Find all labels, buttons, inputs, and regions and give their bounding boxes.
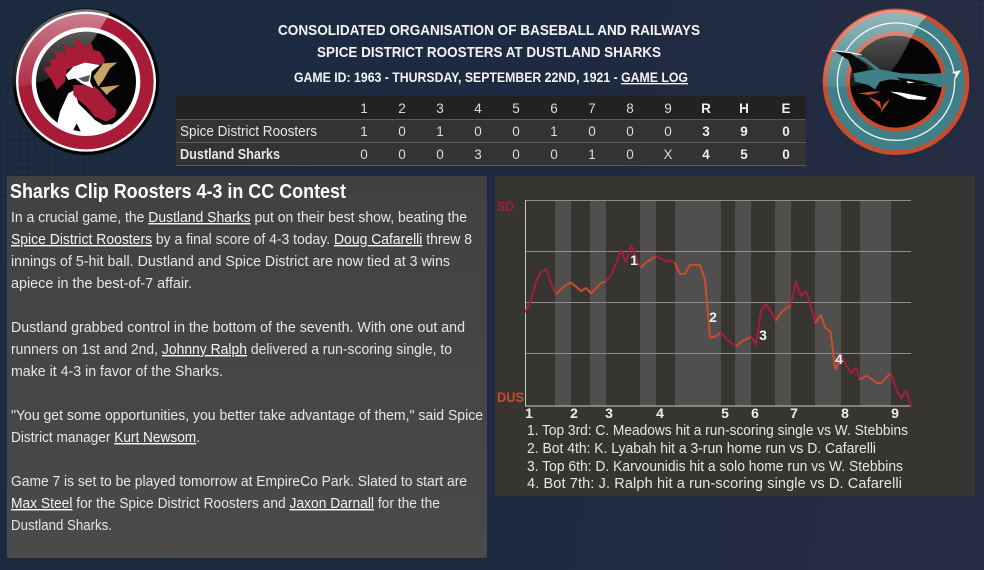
scoreboard header row: 7: [588, 101, 596, 116]
scoreboard header row: 8: [626, 101, 634, 116]
story paragraph 1: apiece in the best-of-7 affair.: [11, 276, 192, 292]
scoreboard header row: 3: [436, 101, 444, 116]
inning axis labels: 5: [721, 405, 729, 421]
story paragraph 1: In a crucial game, the Dustland Sharks put on their best show, beating the: [11, 210, 467, 226]
scoreboard header row: 6: [550, 101, 558, 116]
scoreboard row: Dustland Sharks: 0: [782, 147, 790, 162]
title block: SPICE DISTRICT ROOSTERS AT DUSTLAND SHARKS: [317, 44, 661, 61]
key events list: [527, 423, 908, 492]
win probability line: [526, 245, 911, 406]
key events list: 3. Top 6th: D. Karvounidis hit a solo home run vs W. Stebbins: [527, 459, 903, 475]
story paragraph 3: District manager Kurt Newsom.: [11, 430, 200, 446]
story paragraph 4: Dustland Sharks.: [11, 518, 112, 534]
scoreboard row: Spice District Roosters: 0: [626, 124, 634, 139]
story paragraph 2: make it 4-3 in favor of the Sharks.: [11, 364, 223, 380]
event markers: 3: [759, 327, 767, 343]
scoreboard row: Spice District Roosters: 1: [360, 124, 368, 139]
logo: Spice District Roosters rooster badge: [12, 8, 160, 155]
story paragraph 2: runners on 1st and 2nd, Johnny Ralph delivered a run-scoring single, to: [11, 342, 452, 358]
scoreboard row: Dustland Sharks: Dustland Sharks: [180, 147, 280, 163]
scoreboard table: [176, 96, 806, 166]
event markers: 4: [835, 351, 843, 367]
panel: game story: [7, 176, 487, 558]
scoreboard row: Spice District Roosters: 3: [702, 124, 710, 139]
scoreboard row: Dustland Sharks: 0: [550, 147, 558, 162]
title block: CONSOLIDATED ORGANISATION OF BASEBALL AND RAILWAYS: [278, 22, 700, 39]
scoreboard row: Spice District Roosters: 9: [740, 124, 748, 139]
scoreboard row: Dustland Sharks: 5: [740, 147, 748, 162]
scoreboard header row: 1: [360, 101, 368, 116]
scoreboard row: Dustland Sharks: X: [663, 147, 673, 162]
key events list: 4. Bot 7th: J. Ralph hit a run-scoring single vs D. Cafarelli: [527, 476, 902, 492]
scoreboard row: Dustland Sharks: 1: [588, 147, 596, 162]
logo: Dustland Sharks shark badge: [822, 8, 970, 155]
story paragraph 3: "You get some opportunities, you better take advantage of them," said Spice: [11, 408, 483, 424]
inning axis labels: 3: [605, 405, 613, 421]
story paragraph 4: Max Steel for the Spice District Roosters and Jaxon Darnall for the the: [11, 496, 440, 512]
story paragraph 4: Game 7 is set to be played tomorrow at EmpireCo Park. Slated to start are: [11, 474, 467, 490]
event markers: 2: [709, 309, 717, 325]
inning axis labels: 9: [891, 405, 899, 421]
axis label: DUS: DUS: [497, 390, 524, 405]
inning axis labels: 2: [570, 405, 578, 421]
scoreboard row: Dustland Sharks: [180, 147, 790, 163]
story paragraph 1: Spice District Roosters by a final score of 4-3 today. Doug Cafarelli threw 8: [11, 232, 472, 248]
story paragraph 3: [11, 408, 483, 446]
inning axis labels: [525, 405, 899, 421]
scoreboard header row: H: [739, 101, 749, 116]
scoreboard row: Dustland Sharks: 0: [436, 147, 444, 162]
event markers: 1: [630, 252, 638, 268]
inning axis labels: 7: [790, 405, 798, 421]
title block: [278, 22, 700, 85]
scoreboard header row: 4: [474, 101, 482, 116]
story paragraph 2: [11, 320, 465, 380]
scoreboard row: Spice District Roosters: 0: [588, 124, 596, 139]
scoreboard row: Spice District Roosters: Spice District Roosters: [180, 124, 317, 140]
scoreboard header row: 2: [398, 101, 406, 116]
inning bands: [555, 200, 891, 406]
event markers: [630, 252, 843, 367]
scoreboard row: Dustland Sharks: 0: [398, 147, 406, 162]
scoreboard row: Dustland Sharks: 0: [626, 147, 634, 162]
scoreboard header row: [360, 101, 791, 116]
scoreboard header row: R: [701, 101, 711, 116]
scoreboard header row: 5: [512, 101, 520, 116]
story headline: Sharks Clip Roosters 4-3 in CC Contest: [10, 181, 346, 203]
scoreboard row: Spice District Roosters: 0: [782, 124, 790, 139]
key events list: 2. Bot 4th: K. Lyabah hit a 3-run home run vs D. Cafarelli: [527, 441, 876, 457]
inning axis labels: 6: [751, 405, 759, 421]
inning axis labels: 4: [656, 405, 664, 421]
scoreboard row: Dustland Sharks: 0: [512, 147, 520, 162]
title block: GAME ID: 1963 - THURSDAY, SEPTEMBER 22ND, 1921 - GAME LOG: [294, 70, 688, 85]
story paragraph 1: innings of 5-hit ball. Dustland and Spice District are now tied at 3 wins: [11, 254, 450, 270]
panel: win probability chart: [495, 176, 975, 496]
story paragraph 2: Dustland grabbed control in the bottom of the seventh. With one out and: [11, 320, 465, 336]
key events list: 1. Top 3rd: C. Meadows hit a run-scoring single vs W. Stebbins: [527, 423, 908, 439]
scoreboard row: Spice District Roosters: 0: [398, 124, 406, 139]
scoreboard row: Dustland Sharks: 4: [702, 147, 710, 162]
scoreboard row: Spice District Roosters: [180, 124, 790, 140]
story paragraph 1: [11, 210, 472, 292]
inning axis labels: 8: [841, 405, 849, 421]
scoreboard row: Spice District Roosters: 0: [664, 124, 672, 139]
scoreboard header row: 9: [664, 101, 672, 116]
scoreboard row: Spice District Roosters: 0: [512, 124, 520, 139]
scoreboard row: Spice District Roosters: 1: [436, 124, 444, 139]
scoreboard row: Spice District Roosters: 0: [474, 124, 482, 139]
inning axis labels: 1: [525, 405, 533, 421]
scoreboard row: Spice District Roosters: 1: [550, 124, 558, 139]
axis label: SD: SD: [497, 199, 514, 214]
scoreboard row: Dustland Sharks: 3: [474, 147, 482, 162]
story paragraph 4: [11, 474, 467, 534]
scoreboard row: Dustland Sharks: 0: [360, 147, 368, 162]
scoreboard header row: E: [781, 101, 791, 116]
